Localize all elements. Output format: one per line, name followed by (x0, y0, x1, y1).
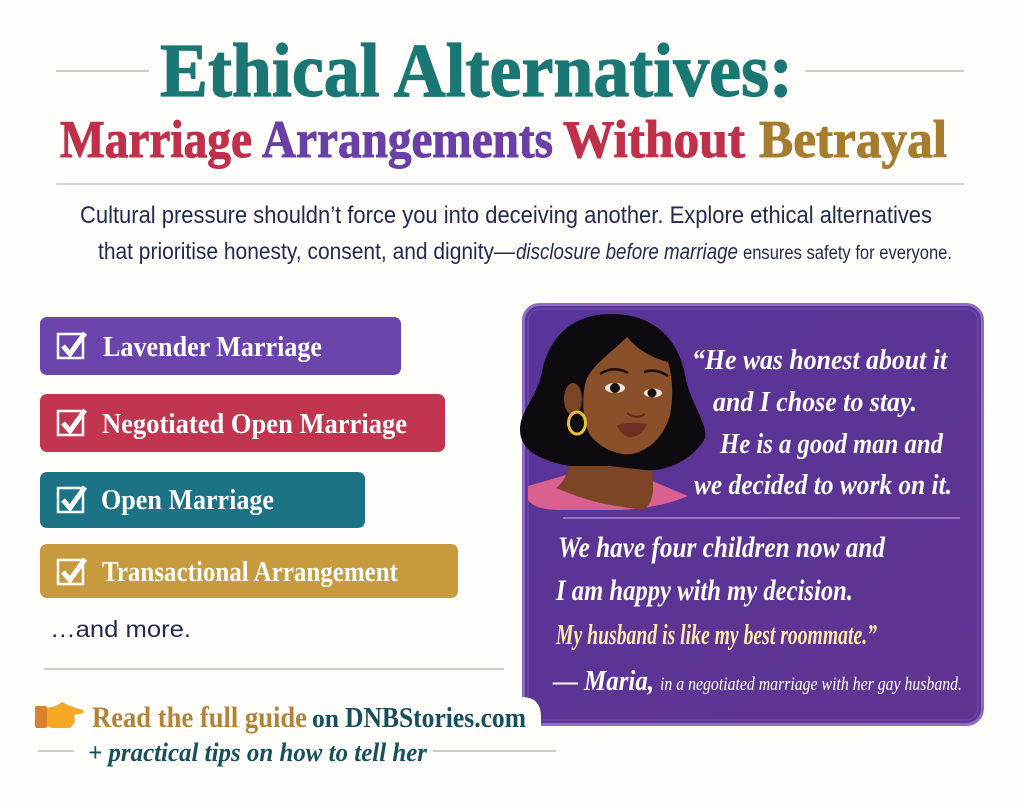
tips line: + practical tips on how to tell her (88, 738, 428, 767)
and more: …and more. (50, 616, 191, 642)
quote: first part: He is a good man and (719, 428, 943, 460)
option: Negotiated Open Marriage (40, 394, 445, 452)
subtitle: Without (563, 111, 745, 169)
footer call to action: on (312, 704, 340, 733)
footer call to action: DNBStories.com (345, 702, 526, 734)
checkbox icon (58, 487, 85, 512)
quote: second part: I am happy with my decision. (555, 574, 853, 607)
link text: Read the full guide (92, 701, 307, 734)
quote: second part (555, 531, 886, 651)
subtitle (60, 111, 947, 169)
attribution: — Maria, (552, 666, 654, 697)
intro text: ensures safety for everyone. (743, 243, 952, 264)
quote: first part: we decided to work on it. (694, 469, 952, 501)
option: Lavender Marriage: Lavender Marriage (103, 331, 322, 363)
quote: first part: “He was honest about it (692, 344, 948, 376)
title: Ethical Alternatives: (160, 29, 793, 113)
option: Transactional Arrangement (40, 544, 458, 598)
option: Negotiated Open Marriage: Negotiated Open Marriage (102, 408, 407, 440)
portrait (520, 314, 705, 510)
quote: second part: My husband is like my best roommate.” (555, 619, 877, 651)
subtitle: Arrangements (262, 111, 553, 169)
intro text: that prioritise honesty, consent, and dignity— (98, 238, 515, 264)
subtitle: Marriage (60, 111, 252, 169)
panel: testimonial (520, 304, 982, 724)
intro text: Cultural pressure shouldn’t force you into deceiving another. Explore ethical alternatives (80, 202, 932, 229)
intro text (80, 202, 952, 264)
checkbox icon (58, 559, 85, 584)
icon: pointing hand (35, 702, 84, 728)
quote: first part (692, 344, 952, 501)
checkbox icon (58, 410, 85, 435)
attribution: in a negotiated marriage with her gay husband. (660, 674, 962, 695)
quote: first part: and I chose to stay. (713, 386, 917, 418)
option: Lavender Marriage (40, 317, 401, 375)
checkbox icon (58, 333, 85, 358)
subtitle: Betrayal (759, 111, 947, 169)
footer call to action (30, 697, 556, 770)
option: Open Marriage (40, 472, 365, 528)
quote: second part: We have four children now and (558, 531, 886, 564)
intro text: disclosure before marriage (516, 239, 738, 264)
option: Open Marriage: Open Marriage (101, 484, 274, 516)
option: Transactional Arrangement: Transactional Arrangement (102, 556, 398, 588)
attribution (552, 666, 962, 697)
